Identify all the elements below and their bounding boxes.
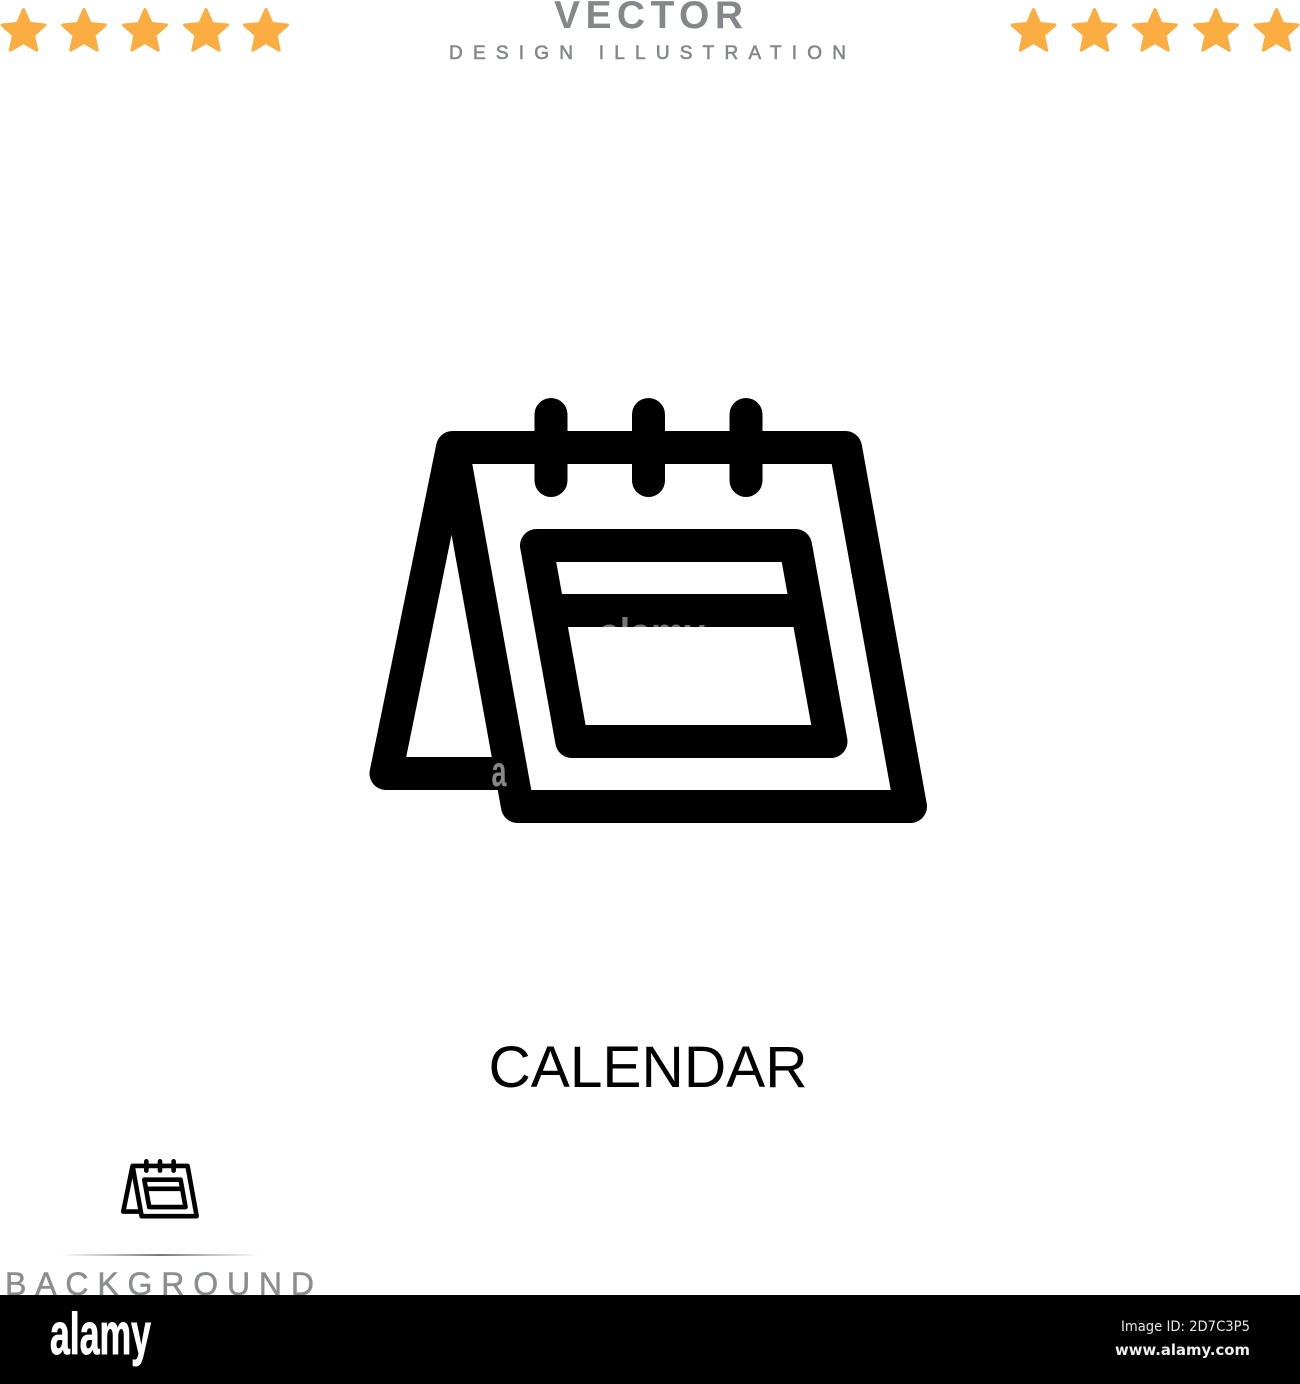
website url: www.alamy.com [1115, 1341, 1250, 1359]
title: CALENDAR: CALENDAR [488, 1035, 808, 1100]
logo: alamy: alamy [50, 1302, 151, 1367]
icon: main calendar [386, 414, 910, 806]
icon: small calendar [123, 1161, 197, 1216]
watermark: clipped alamy: alamy [599, 611, 706, 655]
image id: Image ID: 2D7C3P5 [1121, 1319, 1250, 1335]
right rating stars [1012, 10, 1298, 50]
subheading: DESIGN ILLUSTRATION: DESIGN ILLUSTRATION [449, 43, 846, 64]
footer bar [0, 1295, 1300, 1384]
left rating stars [2, 10, 287, 50]
divider line [60, 1254, 260, 1256]
label: BACKGROUND: BACKGROUND [5, 1266, 314, 1302]
watermark: gray letter a: a [492, 748, 507, 796]
